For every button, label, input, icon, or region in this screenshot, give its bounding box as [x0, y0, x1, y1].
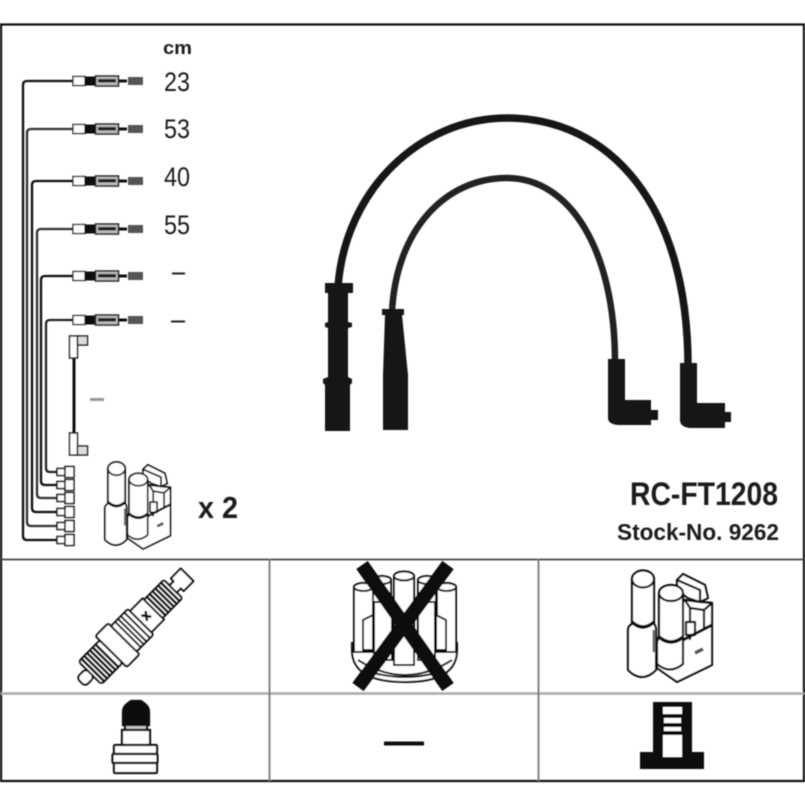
- length values: 55: [164, 210, 190, 240]
- cross mark: [358, 565, 448, 687]
- cable length column: [90, 38, 192, 401]
- icon: ignition coil: [628, 570, 712, 682]
- heading: cm: cm: [163, 38, 192, 58]
- length values: 40: [164, 162, 190, 192]
- distributor cap: [352, 572, 457, 682]
- empty length dashes: [90, 272, 185, 401]
- ignition cable set photo: [323, 118, 731, 431]
- small ignition coil icon: [105, 462, 170, 549]
- short cable angled boot: [608, 359, 658, 425]
- icon: spark plug: [65, 559, 203, 698]
- length values: 23: [164, 67, 190, 97]
- long cable straight boot: [323, 283, 353, 431]
- dash: no part: [384, 742, 424, 746]
- long cable: [338, 118, 688, 366]
- icon: coil terminal boot: [640, 702, 704, 769]
- short cable straight boot: [382, 309, 408, 430]
- icon: distributor cap crossed out: [352, 565, 457, 687]
- short lead with angled ends: [70, 336, 88, 455]
- harness wires: [23, 81, 73, 540]
- length values: 53: [164, 114, 190, 144]
- short cable: [392, 178, 615, 362]
- stock number: Stock-No. 9262: [617, 519, 779, 545]
- long cable angled boot: [680, 363, 731, 428]
- wiring schematic: [23, 76, 143, 546]
- wire connectors: [73, 76, 143, 325]
- quantity label: x 2: [198, 490, 238, 525]
- part number: RC-FT1208: [630, 476, 778, 512]
- icon: plug terminal: [112, 701, 158, 773]
- wire terminals: [57, 466, 74, 546]
- length values: [164, 67, 190, 240]
